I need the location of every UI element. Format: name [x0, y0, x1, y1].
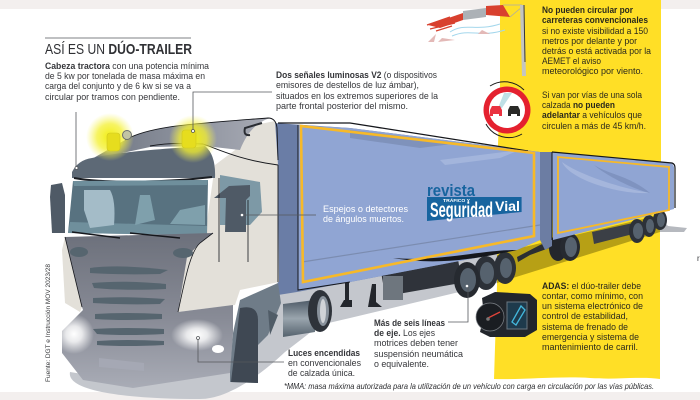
text: líneas de eje: suspensión neumática: [374, 348, 464, 359]
road shadow: [70, 215, 687, 399]
text: cabeza tractora: [45, 60, 210, 102]
text: restricciones: detrás o está activada por la: [542, 45, 652, 56]
no overtaking sign: [484, 82, 530, 138]
license plate: [99, 358, 144, 371]
drive wheel and fuel tank: [283, 290, 332, 337]
headlight glow: [54, 314, 94, 354]
text: cabeza tractora: de 5 kw por tonelada de masa máxima en: [45, 70, 205, 81]
text: restricciones: carreteras convencionales: [542, 14, 648, 25]
windsock: [427, 5, 525, 76]
front wheel and fender: [230, 283, 281, 383]
logo: Revista Tráfico y Seguridad Vial: Vial: [495, 198, 520, 214]
text: restricciones: metros por delante y por: [542, 35, 637, 46]
roof fairing: [90, 118, 270, 160]
source note: Fuente: DGT e Instrucción MOV 2023/28: [45, 264, 52, 382]
text: luces encendidas: Luces encendidas: [288, 347, 360, 358]
text: restricciones: meteorológico por viento.: [542, 65, 643, 76]
text: espejos: [323, 203, 408, 224]
footnote: *MMA: masa máxima autorizada para la utilización de un vehículo con carga en circulación por las vías públicas.: [284, 381, 654, 391]
text: restricciones: No pueden circular por: [542, 4, 633, 15]
text: señales luminosas: emisores de destellos de luz ámbar),: [276, 79, 419, 90]
text: cabeza tractora: circular por tramos con pendiente.: [45, 91, 180, 102]
tractor cab: [50, 113, 281, 388]
text: ADAS: contar, como mínimo, con: [542, 290, 643, 301]
text: líneas de eje: motrices deben tener: [374, 337, 458, 348]
text: restricciones: si no existe visibilidad a 150: [542, 25, 648, 36]
instrument cluster: [476, 292, 537, 337]
text: luces encendidas: de calzada única.: [288, 367, 355, 378]
title: ASÍ ES UN DÚO-TRAILER: [45, 40, 192, 58]
text: ADAS: un sistema electrónico de: [542, 300, 643, 311]
text: cabeza tractora: Cabeza tractora con una potencia mínima: [45, 60, 210, 71]
air vent handle: [245, 123, 262, 135]
icon: red car: [490, 106, 502, 116]
text: luces encendidas: [288, 347, 361, 378]
text: restricciones: adelantar a vehículos que: [542, 109, 642, 120]
text: luces encendidas: en convencionales: [288, 357, 361, 368]
leader lines: [75, 92, 468, 362]
cropped edge letter: r: [697, 254, 700, 263]
second trailer: [552, 152, 675, 240]
text: líneas de eje: o equivalente.: [374, 358, 429, 369]
yellow panel: [494, 0, 661, 379]
text: espejos: de ángulos muertos.: [323, 213, 404, 224]
text: ADAS: [542, 280, 643, 352]
trailer wheels and chassis: [340, 210, 667, 307]
logo: Revista Tráfico y Seguridad Vial: [427, 181, 522, 222]
text: restricciones: calzada no pueden: [542, 99, 615, 110]
text: señales luminosas: Dos señales luminosas V2 (o dispositivos: [276, 69, 437, 80]
text: restricciones: AEMET el aviso: [542, 55, 601, 66]
logo: Revista Tráfico y Seguridad Vial: TRÁFICO Y: [443, 197, 470, 203]
cab side: [178, 121, 279, 312]
text: señales luminosas: parte frontal posterior del mismo.: [276, 100, 408, 111]
side window: [220, 175, 262, 225]
text: ADAS: emergencia y sistema de: [542, 331, 639, 342]
text: líneas de eje: Más de seis líneas: [374, 317, 445, 328]
text: restricciones: circulen a más de 45 km/h.: [542, 120, 646, 131]
text: ADAS: sistema de frenado de: [542, 321, 628, 332]
text: restricciones: Si van por vías de una sola: [542, 89, 643, 100]
left mirror: [50, 183, 65, 233]
right mirror: [214, 185, 250, 232]
text: ADAS: mantenimiento de carril.: [542, 341, 638, 352]
text: señales luminosas: situados en los extremos superiores de la: [276, 90, 439, 101]
connection between trailers: [540, 152, 552, 250]
wipers: [72, 232, 180, 238]
windshield: [68, 180, 208, 235]
first trailer: [274, 123, 540, 295]
grille panel: [62, 233, 233, 388]
text: restricciones: [542, 4, 652, 131]
text: líneas de eje: [374, 317, 464, 369]
text: ADAS: ADAS: el dúo-trailer debe: [542, 280, 641, 291]
yellow outline: [301, 126, 534, 282]
text: líneas de eje: de eje. Los ejes: [374, 327, 435, 338]
amber lights: [86, 113, 134, 161]
text: cabeza tractora: carga del conjunto y de 6 kw si se va a: [45, 80, 192, 91]
icon: black car: [508, 106, 520, 116]
grille slats: [90, 266, 168, 346]
visor: [72, 146, 215, 178]
logo: Revista Tráfico y Seguridad Vial: revista: [427, 181, 475, 200]
text: señales luminosas: [276, 69, 439, 111]
logo: Revista Tráfico y Seguridad Vial: Seguridad: [430, 199, 493, 222]
text: espejos: Espejos o detectores: [323, 203, 408, 214]
text: ADAS: control de estabilidad,: [542, 310, 628, 321]
